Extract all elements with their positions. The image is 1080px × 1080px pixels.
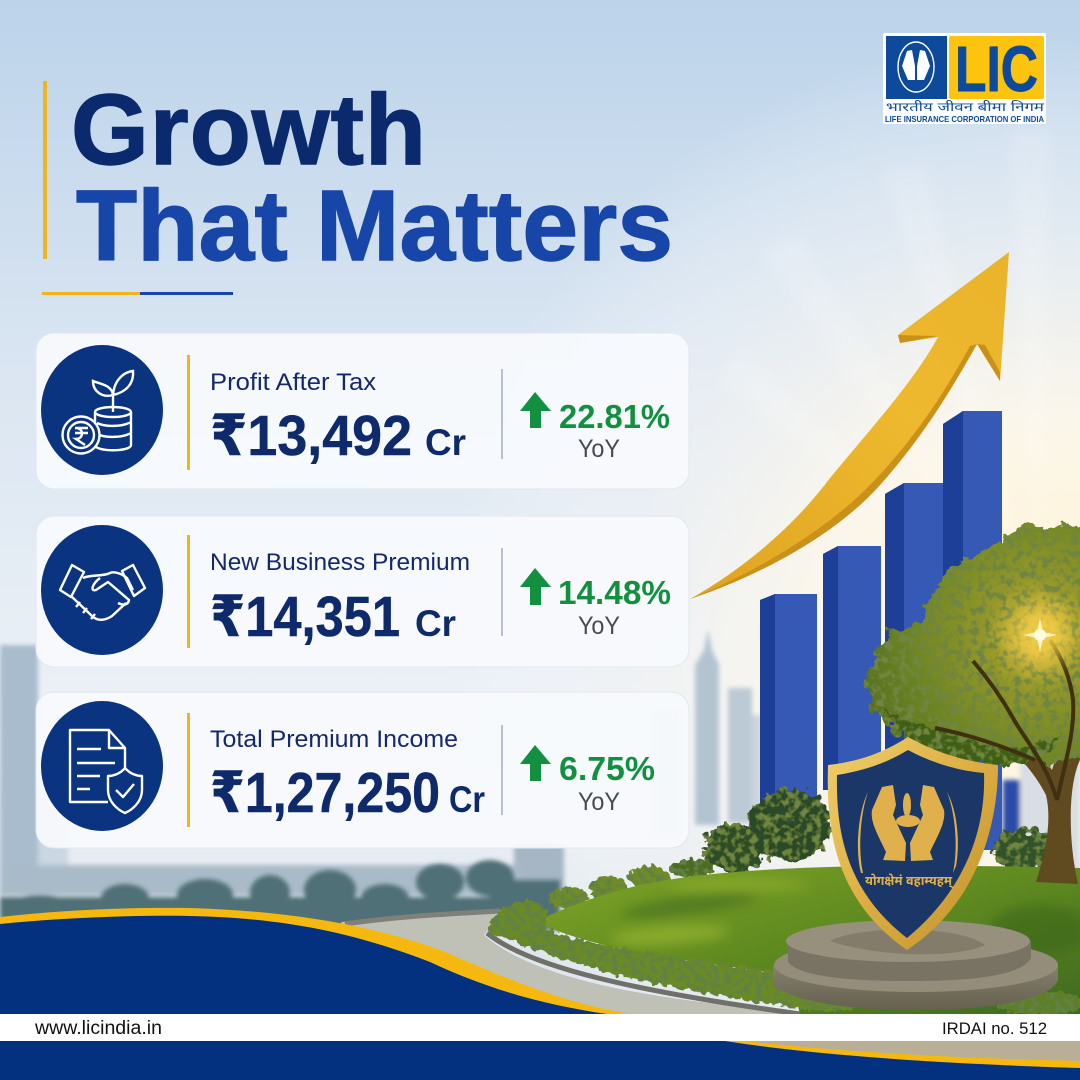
panel: Total Premium Income (36, 692, 689, 848)
panel: New Business Premium: Cr (415, 603, 456, 644)
footer: lower navy band (0, 1041, 1080, 1080)
emblem: motto: योगक्षेमं वहाम्यहम् (865, 873, 954, 889)
footer: website: www.licindia.in (34, 1018, 162, 1039)
title: That Matters (76, 170, 673, 282)
footer wave: navy with gold edge (0, 908, 630, 1014)
panel: Total Premium Income: Cr (449, 779, 485, 820)
garden: curb below hedge (487, 933, 800, 1014)
panel: New Business Premium (36, 516, 689, 667)
panel: Profit After Tax (36, 333, 689, 489)
stone plinth (773, 920, 1058, 1010)
garden: green lawn (535, 866, 1080, 1014)
footer: white strip (0, 1014, 1080, 1041)
background: hazy city skyline (0, 629, 1080, 900)
icon: handshake (60, 565, 145, 620)
icon: coins with plant (62, 371, 133, 454)
chart: blue growth bars (760, 411, 1002, 850)
panel: New Business Premium: ₹14,351 (210, 585, 400, 649)
title: Growth (71, 74, 426, 186)
footer: lower pavement strip (730, 1041, 1080, 1065)
panel: Total Premium Income: ₹1,27,250 (210, 761, 440, 825)
panel: Total Premium Income: 6.75% (559, 750, 655, 787)
background: distant tree line (0, 860, 560, 930)
panel: Total Premium Income: Total Premium Income (210, 726, 458, 753)
footer: gold accent (725, 1041, 1080, 1068)
garden: bushes behind lawn (703, 789, 1059, 872)
title (71, 74, 673, 282)
title underline (42, 292, 233, 295)
garden: upper hedge bushes (548, 859, 714, 909)
title accent bar (43, 81, 47, 259)
icon: document with shield (70, 730, 142, 813)
logo: LIC: LIFE INSURANCE CORPORATION OF INDIA (885, 114, 1044, 124)
garden: paved walkway (300, 910, 860, 1016)
logo: LIC (883, 33, 1046, 124)
garden: curved hedge (488, 900, 1080, 1015)
panel: Profit After Tax: Cr (425, 422, 466, 463)
logo: LIC: भारतीय जीवन बीमा निगम (886, 99, 1045, 114)
panel: New Business Premium: YoY (578, 612, 620, 640)
panel: New Business Premium: 14.48% (558, 574, 671, 611)
panel: Profit After Tax: Profit After Tax (210, 369, 376, 396)
garden: lawn light and shadow (610, 880, 1080, 955)
logo: LIC: LIC (955, 33, 1038, 105)
footer: licence number: IRDAI no. 512 (942, 1019, 1047, 1038)
tree (866, 524, 1080, 884)
emblem: gold shield (828, 737, 998, 950)
panel: Profit After Tax: YoY (578, 435, 620, 463)
panel: Profit After Tax: 22.81% (559, 398, 670, 435)
panel: Total Premium Income: YoY (578, 788, 620, 816)
emblem: hands and lamp (858, 785, 958, 873)
garden: walkway curb (345, 911, 500, 924)
icon: rising golden arrow (690, 252, 1009, 599)
panel: Profit After Tax: ₹13,492 (210, 404, 412, 468)
panel: New Business Premium: New Business Premium (210, 549, 470, 576)
